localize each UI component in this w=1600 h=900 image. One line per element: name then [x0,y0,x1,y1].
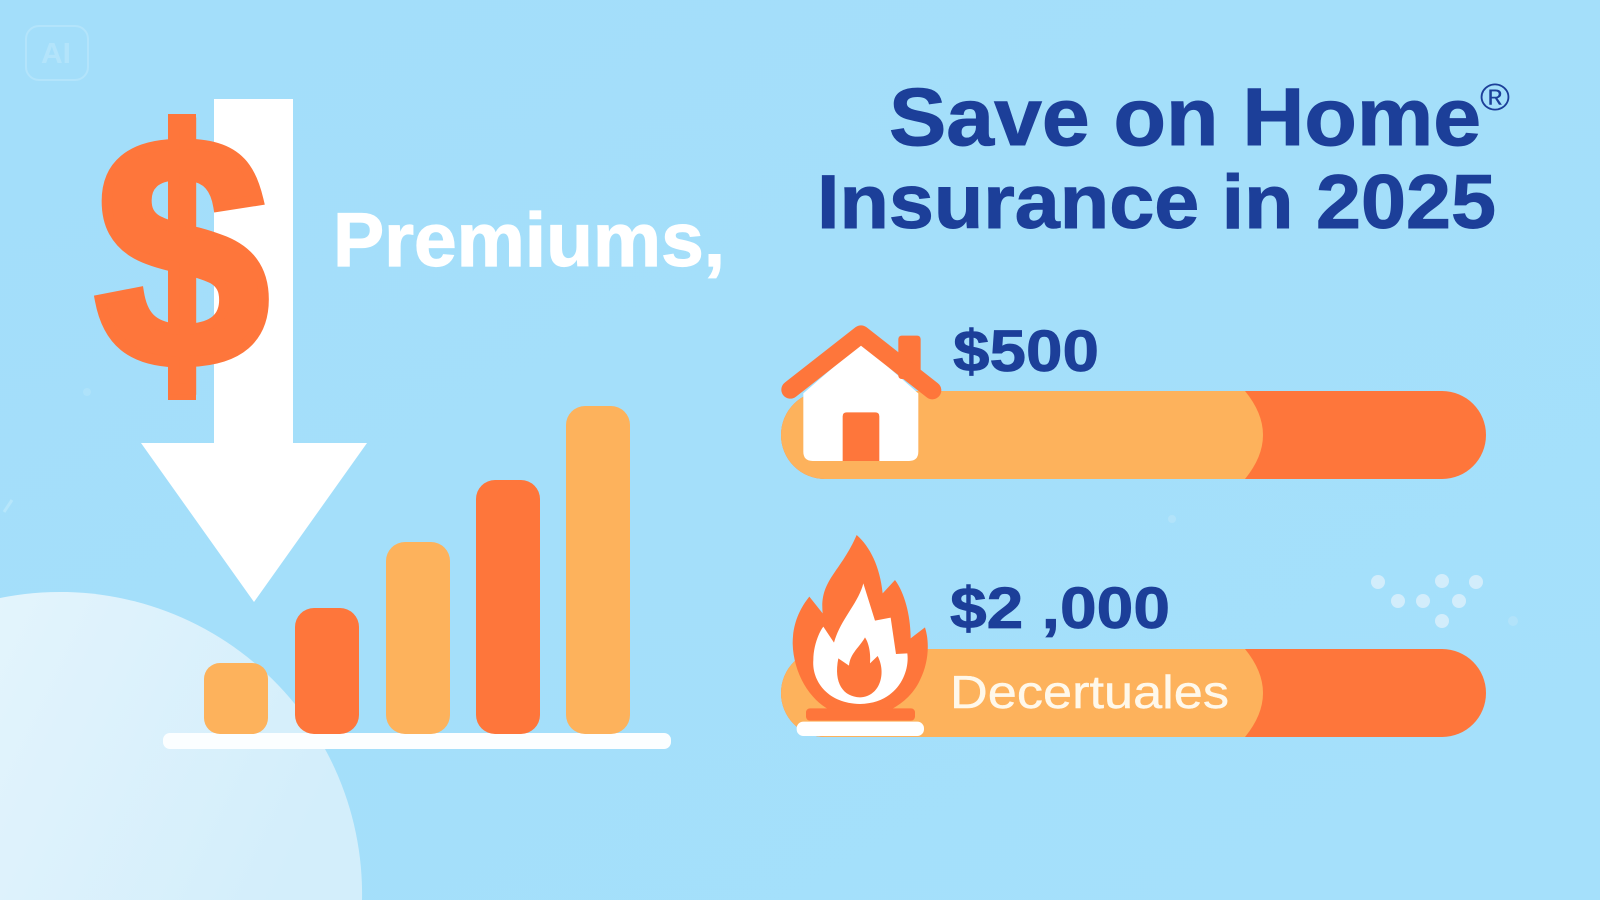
title line 1: Save on Home [889,72,1481,163]
flame inner white [813,583,908,704]
flame outer [793,535,928,710]
chimney [898,336,921,379]
title line 2: Insurance in 2025 [817,160,1496,245]
icon: flame [793,535,928,736]
chart baseline [163,733,671,749]
bar: $500 [781,391,1486,479]
background circle [0,592,362,900]
label: deductibles: Decertuales [950,666,1229,718]
door [843,412,879,461]
registered mark: ® [1480,77,1510,119]
flame inner orange [837,637,882,697]
decorative dots [4,388,1518,628]
bar 4 [476,480,540,734]
badge: AI: AI [41,38,71,70]
bar 3 [386,542,450,734]
flame base [806,708,915,721]
bar 5 [566,406,630,734]
bar 2 [295,608,359,734]
label: premiums: Premiums, [333,198,725,283]
bar 1 [204,663,268,734]
bar: $2,000 [781,649,1486,737]
amount: $2,000: $2 ,000 [950,576,1170,641]
icon: house [790,334,932,461]
bar chart [163,406,671,749]
arrow: down [141,99,367,602]
flame plate [797,722,924,736]
roof [790,334,932,390]
amount: $500: $500 [953,319,1099,384]
title [817,72,1510,245]
house body [803,343,918,461]
badge: AI [26,26,88,80]
icon: dollar sign: $ [96,71,268,435]
